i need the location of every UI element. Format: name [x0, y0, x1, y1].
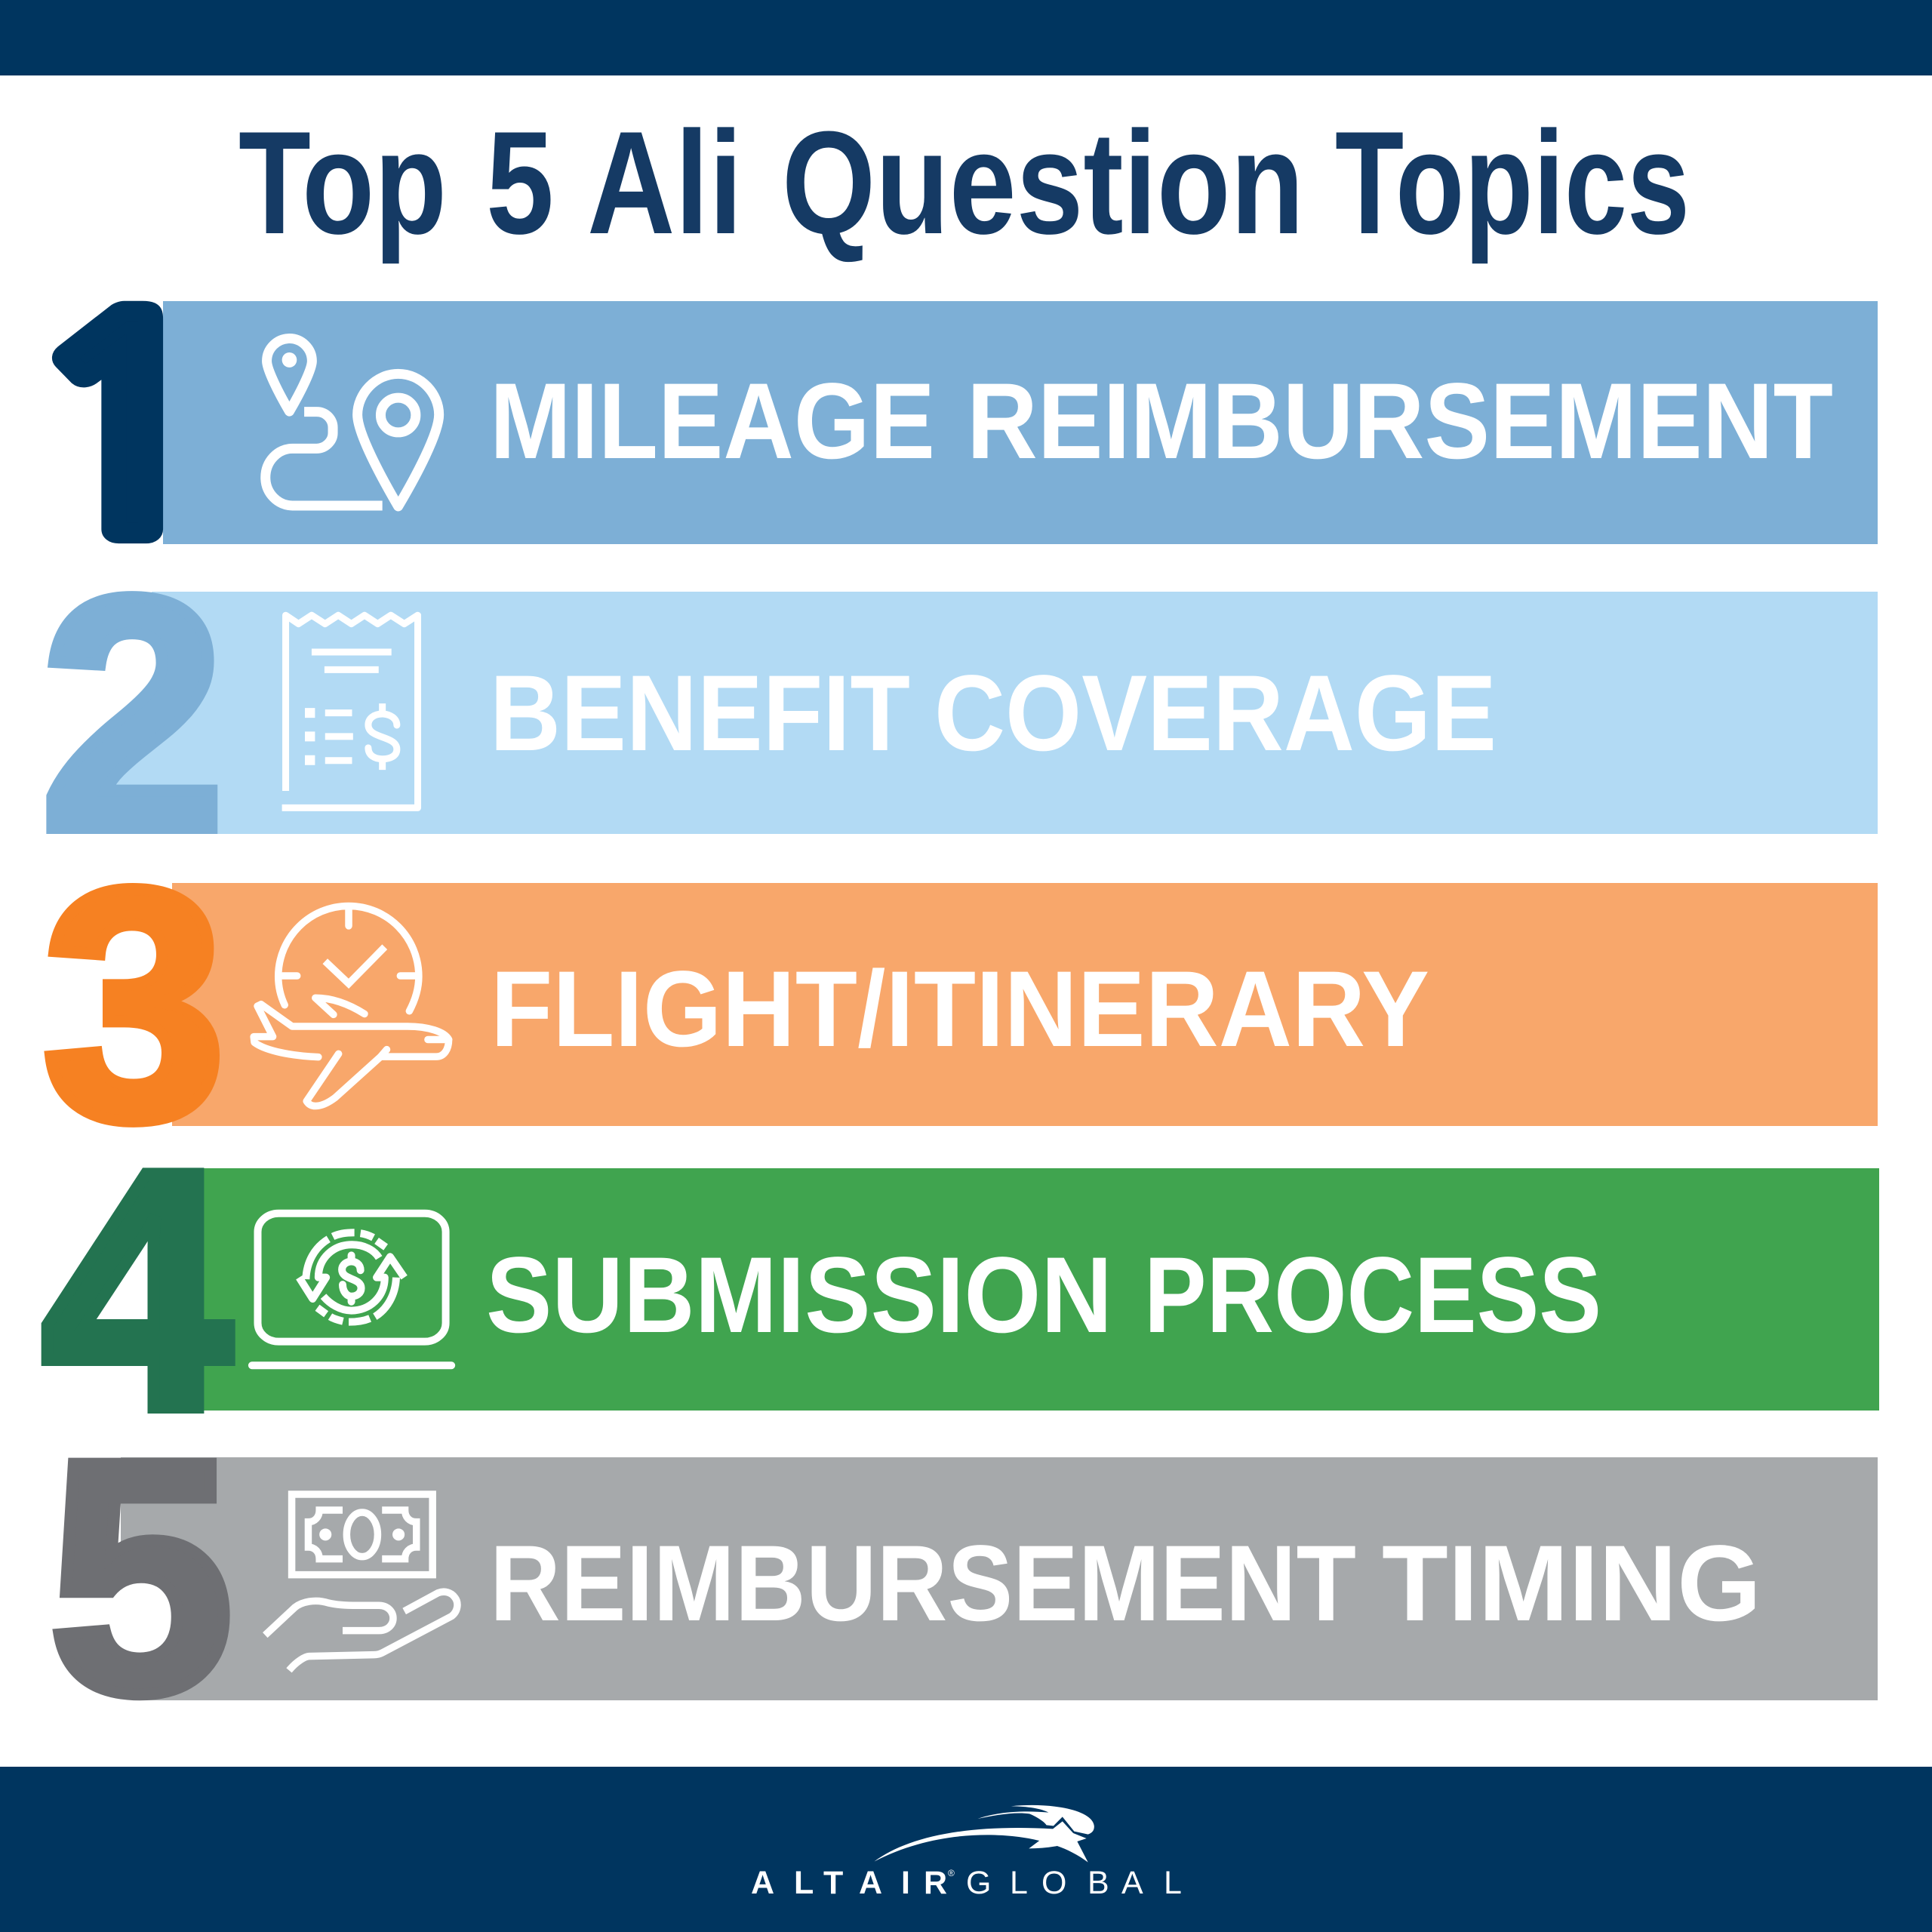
footer band	[0, 1767, 1932, 1932]
title: Top	[238, 101, 447, 265]
panel: mileage reimbursement	[20, 287, 1878, 576]
panel background 4	[189, 1168, 1879, 1411]
header band	[0, 0, 1932, 75]
label: benefit coverage: BENEFIT	[490, 654, 910, 774]
label: benefit coverage	[490, 654, 1497, 774]
label: submission process: PROCESS	[1144, 1235, 1601, 1355]
logo wordmark: ALTAIR: ALTAIR	[751, 1865, 947, 1901]
label: submission process	[486, 1235, 1601, 1355]
number 3: 3	[43, 821, 226, 1187]
panel background 3	[172, 883, 1878, 1126]
title: Question	[782, 101, 1304, 265]
panel: flight itinerary	[43, 821, 1878, 1187]
panel: reimbursement timing	[49, 1392, 1878, 1761]
number 2: 2	[41, 528, 225, 898]
label: mileage reimbursement	[490, 361, 1833, 481]
label: mileage reimbursement: REIMBURSEMENT	[967, 361, 1833, 481]
number 1: 1	[20, 287, 229, 576]
label: submission process: SUBMISSION	[486, 1235, 1112, 1355]
label: benefit coverage: COVERAGE	[934, 654, 1497, 774]
icon: clock and plane	[254, 906, 449, 1106]
logo mark: shooting star	[874, 1805, 1094, 1863]
panel background 2	[91, 592, 1878, 834]
title: Topics	[1335, 101, 1690, 265]
logo wordmark: GLOBAL: GLOBAL	[966, 1865, 1182, 1901]
logo: Altair Global	[751, 1805, 1182, 1901]
icon: laptop with money cycle	[252, 1214, 451, 1365]
registered mark: ®	[948, 1868, 955, 1878]
icon: hand holding banknote	[265, 1494, 457, 1670]
panel: submission process	[42, 1101, 1879, 1480]
panel background 1	[163, 301, 1878, 544]
title	[238, 101, 1690, 265]
number 4: 4	[42, 1101, 233, 1480]
label: mileage reimbursement: MILEAGE	[490, 361, 935, 481]
title: Ali	[587, 101, 743, 265]
title: 5	[486, 101, 554, 265]
label: reimbursement timing: TIMING	[1382, 1524, 1761, 1644]
panel: benefit coverage	[41, 528, 1878, 898]
icon: receipt with dollar sign	[282, 615, 418, 808]
panel background 5	[121, 1457, 1878, 1700]
icon: map pins and route	[266, 339, 439, 506]
label: flight itinerary: FLIGHT/ITINERARY	[491, 949, 1429, 1069]
number 5: 5	[49, 1392, 233, 1761]
label: reimbursement timing: REIMBURSEMENT	[490, 1524, 1356, 1644]
